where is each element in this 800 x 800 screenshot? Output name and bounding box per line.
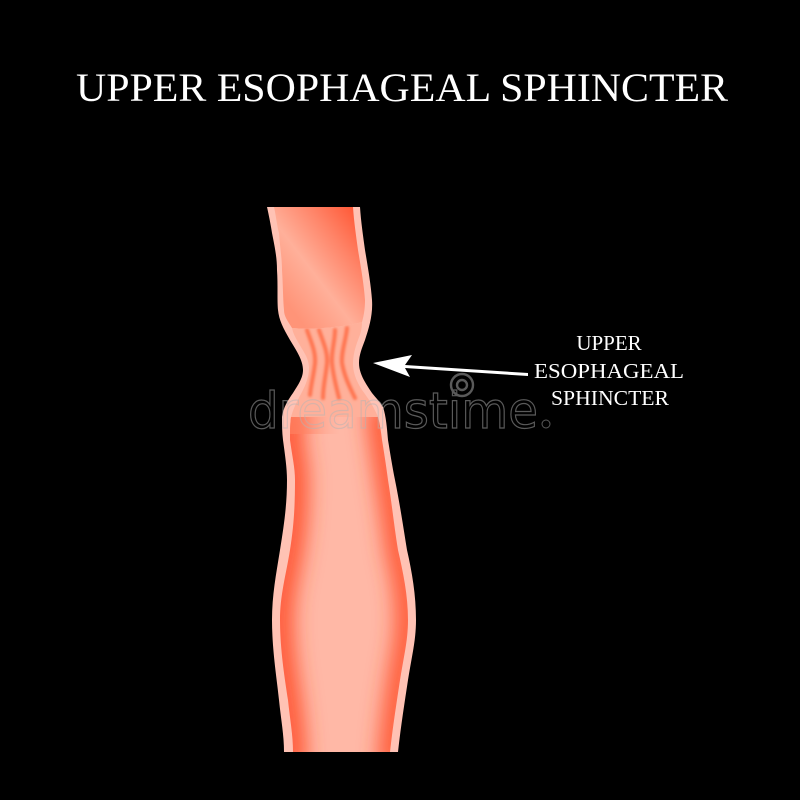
sphincter neck	[291, 322, 378, 417]
upper chamber	[274, 207, 365, 329]
watermark: dreamstime	[248, 382, 538, 440]
lower chamber	[280, 417, 408, 752]
callout label	[534, 331, 684, 410]
callout arrow	[373, 355, 528, 377]
callout label: ESOPHAGEAL	[534, 359, 684, 383]
infographic canvas	[76, 74, 728, 752]
esophagus illustration	[267, 207, 416, 770]
callout label: UPPER	[576, 331, 642, 355]
title: UPPER ESOPHAGEAL SPHINCTER	[76, 65, 728, 110]
outer wall	[267, 207, 416, 752]
lower chamber top patch	[290, 417, 330, 434]
sphincter folds	[307, 328, 355, 398]
callout label: SPHINCTER	[551, 386, 669, 410]
